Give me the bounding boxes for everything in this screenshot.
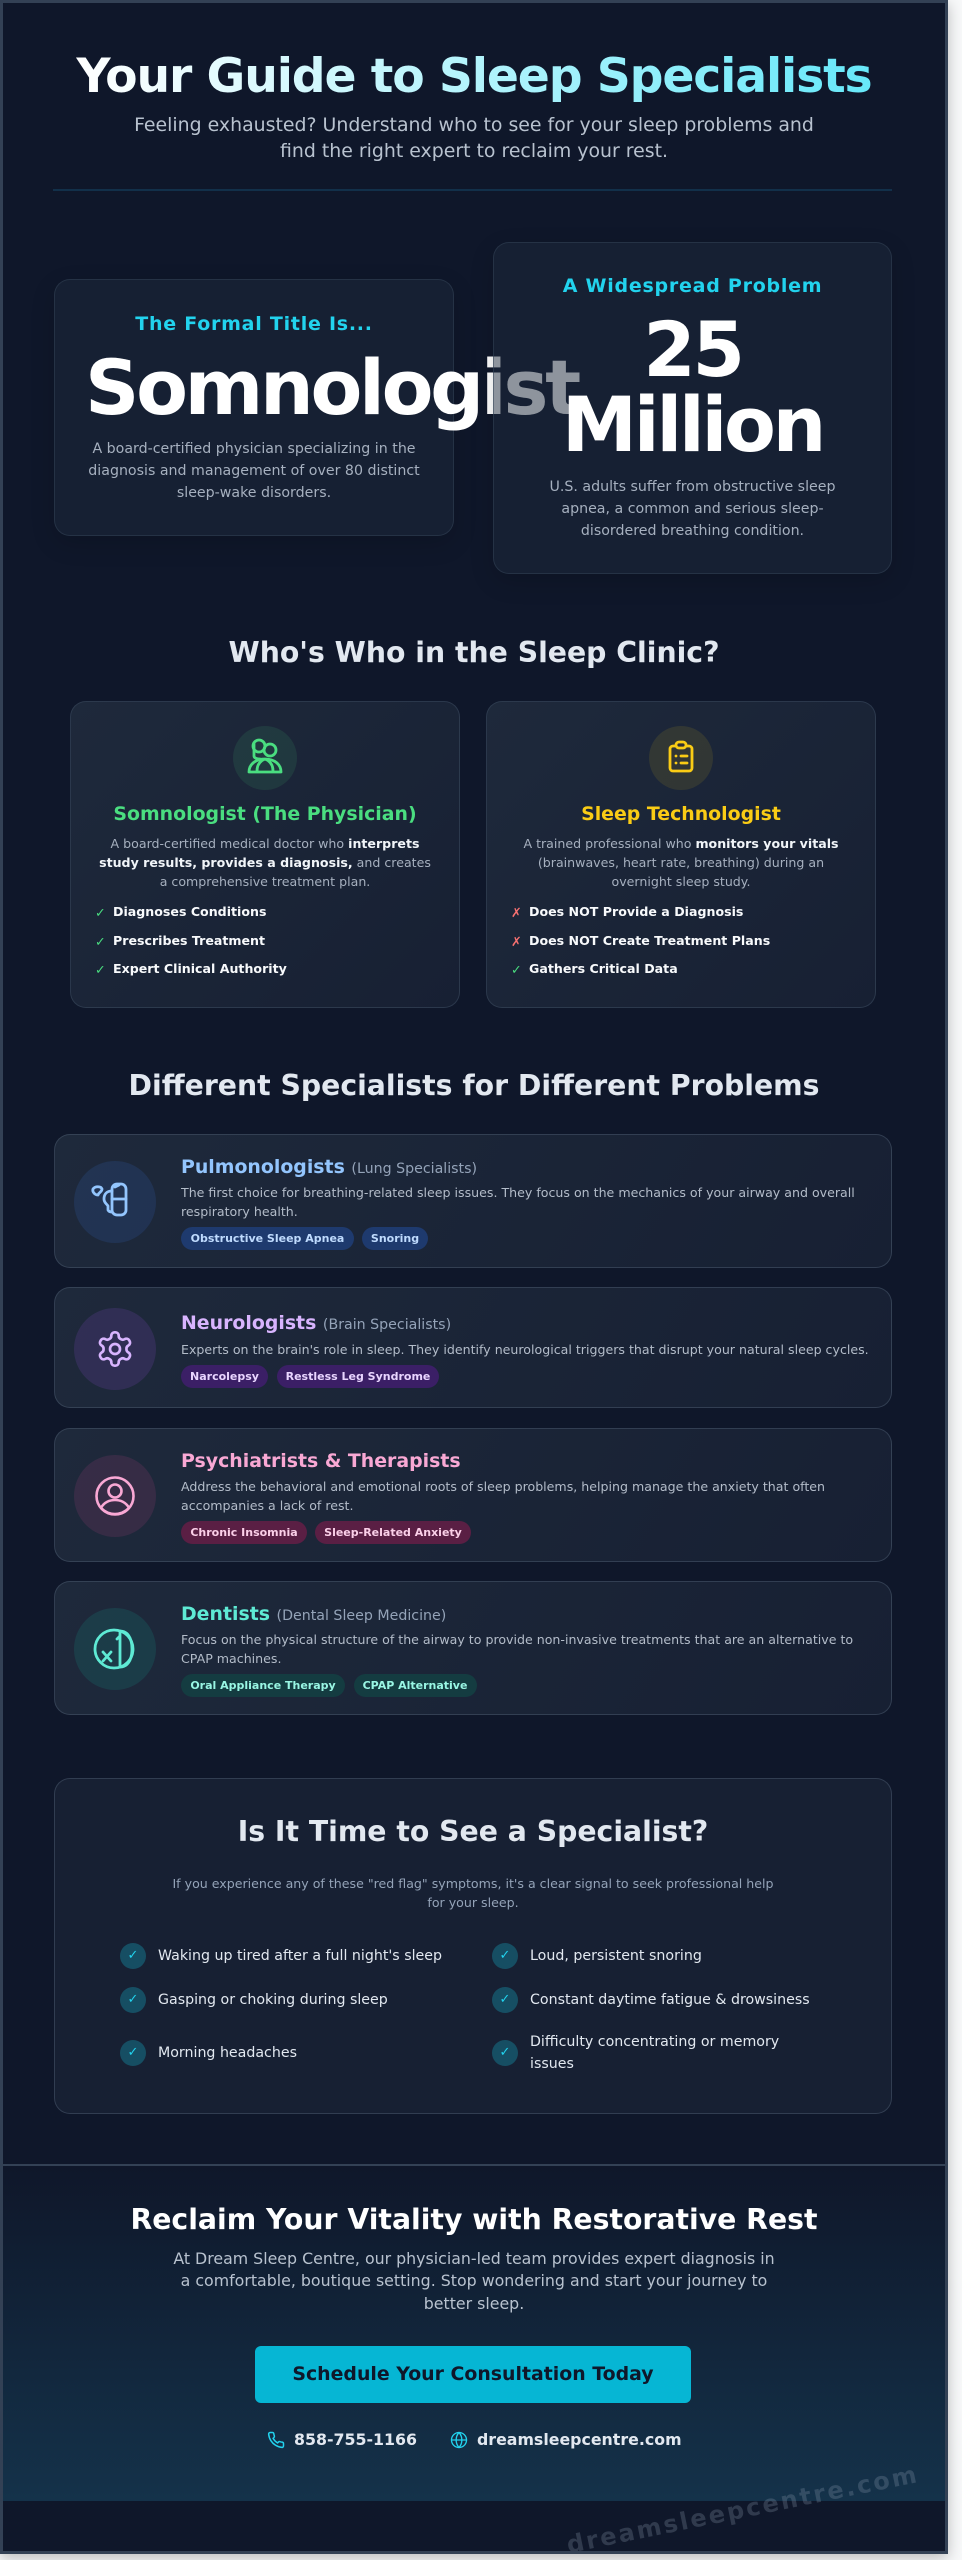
check text: Difficulty concentrating or memory	[530, 2034, 779, 2050]
list: technologist duties: ✗	[511, 934, 522, 950]
statistic: 25 million: Million	[562, 380, 823, 468]
card title: Somnologist (The Physician)	[113, 803, 417, 825]
specialist title: Psychiatrists & Therapists	[181, 1450, 461, 1472]
icon: clipboard	[649, 726, 713, 790]
specialist description: Address the behavioral and emotional roots of sleep problems, helping manage the anxiety that often	[181, 1478, 825, 1494]
heading: who's who: Who's Who in the Sleep Clinic?	[228, 636, 719, 669]
panel: widespread problem	[493, 242, 892, 574]
icon: lungs	[74, 1161, 156, 1243]
statistic description	[550, 479, 835, 539]
subtitle: find the right expert to reclaim your rest.	[280, 140, 668, 162]
footer description: a comfortable, boutique setting. Stop wondering and start your journey to	[181, 2271, 767, 2290]
check item: ✓	[500, 1992, 510, 2007]
card title: Sleep Technologist	[581, 803, 781, 825]
tag	[362, 1226, 428, 1250]
checklist intro: If you experience any of these "red flag" symptoms, it's a clear signal to seek professional help	[172, 1876, 774, 1891]
statistic: 25 million	[562, 306, 823, 468]
tag: CPAP Alternative	[363, 1678, 467, 1692]
panel: red flag checklist	[54, 1778, 892, 2114]
tag: Obstructive Sleep Apnea	[191, 1232, 344, 1244]
panel: sleep technologist	[486, 701, 876, 1008]
list: physician duties: Expert Clinical Authority	[113, 961, 287, 976]
footer description: At Dream Sleep Centre, our physician-led team provides expert diagnosis in	[173, 2249, 775, 2268]
panel: formal title	[54, 279, 454, 536]
button: schedule consultation: Schedule Your Consultation Today	[292, 2363, 654, 2385]
checklist intro: for your sleep.	[427, 1895, 519, 1910]
check item	[492, 1987, 518, 2013]
tag: Oral Appliance Therapy	[190, 1678, 336, 1692]
specialist description: Focus on the physical structure of the airway to provide non-invasive treatments that are an alternative to	[181, 1632, 853, 1646]
footer panel	[3, 2164, 945, 2501]
tag: Narcolepsy	[190, 1370, 259, 1382]
list: physician duties: ✓	[95, 906, 106, 921]
tag	[181, 1674, 345, 1696]
icon: user circle	[74, 1455, 156, 1537]
specialist description: Experts on the brain's role in sleep. They identify neurological triggers that disrupt your natural sleep cycles.	[181, 1342, 869, 1356]
check text: Morning headaches	[158, 2045, 297, 2061]
subtitle: Feeling exhausted? Understand who to see for your sleep problems and	[134, 114, 814, 136]
formal title description: diagnosis and management of over 80 distinct	[88, 463, 420, 479]
subtitle	[134, 114, 814, 162]
specialist description	[181, 1632, 853, 1666]
check item	[492, 1943, 518, 1969]
check text: Gasping or choking during sleep	[158, 1992, 388, 2008]
specialist title: Dentists (Dental Sleep Medicine)	[181, 1603, 446, 1625]
check text: issues	[530, 2056, 574, 2072]
icon: gear	[74, 1308, 156, 1390]
check item	[492, 2040, 518, 2066]
tag: Sleep-Related Anxiety	[324, 1526, 462, 1538]
icon: dental	[74, 1608, 156, 1690]
list: technologist duties: Does NOT Provide a Diagnosis	[529, 904, 743, 919]
card description: a comprehensive treatment plan.	[160, 874, 370, 888]
panel: dentists	[54, 1581, 892, 1715]
label: widespread problem: A Widespread Problem	[563, 275, 822, 297]
specialist title: Pulmonologists (Lung Specialists)	[181, 1156, 477, 1178]
panel: somnologist physician	[70, 701, 460, 1008]
tag	[181, 1226, 354, 1250]
card description: overnight sleep study.	[612, 874, 750, 888]
card description	[99, 836, 431, 888]
list: physician duties: ✓	[95, 963, 106, 978]
check item: ✓	[500, 1948, 510, 1963]
checklist heading: Is It Time to See a Specialist?	[238, 1815, 708, 1848]
check text: Loud, persistent snoring	[530, 1948, 702, 1964]
formal title description: sleep-wake disorders.	[177, 485, 331, 501]
statistic description: apnea, a common and serious sleep-	[561, 501, 824, 517]
button: schedule consultation	[255, 2346, 691, 2403]
specialist description: accompanies a lack of rest.	[181, 1498, 354, 1512]
check item: ✓	[128, 2045, 138, 2060]
tag	[181, 1364, 268, 1388]
tag: Chronic Insomnia	[190, 1526, 298, 1538]
card description: (brainwaves, heart rate, breathing) during an	[538, 854, 824, 870]
tag: Restless Leg Syndrome	[286, 1370, 430, 1382]
list: technologist duties: ✓	[511, 963, 522, 978]
contact: phone: 858-755-1166	[294, 2430, 417, 2449]
footer description: better sleep.	[424, 2294, 524, 2313]
list: physician duties: Prescribes Treatment	[113, 932, 265, 948]
check text: Constant daytime fatigue & drowsiness	[530, 1992, 810, 2008]
card description: A board-certified medical doctor who interprets	[111, 836, 419, 850]
specialist title: Neurologists (Brain Specialists)	[181, 1312, 451, 1334]
statistic description: disordered breathing condition.	[581, 523, 804, 539]
icon: physician	[233, 726, 297, 790]
footer description	[173, 2249, 775, 2313]
panel: pulmonologists	[54, 1134, 892, 1268]
specialist description: The first choice for breathing-related sleep issues. They focus on the mechanics of your airway and overall	[181, 1184, 855, 1200]
heading: different specialists: Different Specialists for Different Problems	[129, 1069, 819, 1102]
check text: Waking up tired after a full night's sleep	[158, 1948, 442, 1964]
tag	[354, 1674, 476, 1696]
card description	[523, 836, 839, 888]
list: physician duties: Diagnoses Conditions	[113, 904, 266, 919]
checklist intro	[172, 1876, 774, 1910]
panel: neurologists	[54, 1287, 892, 1408]
formal title description: A board-certified physician specializing in the	[92, 441, 416, 457]
check item	[120, 1987, 146, 2013]
list: technologist duties: Does NOT Create Treatment Plans	[529, 932, 770, 948]
check item: ✓	[128, 1992, 138, 2007]
check item: ✓	[128, 1948, 138, 1963]
specialist description: CPAP machines.	[181, 1650, 281, 1666]
tag: Snoring	[371, 1232, 419, 1244]
panel: psychiatrists	[54, 1428, 892, 1562]
footer heading: Reclaim Your Vitality with Restorative Rest	[130, 2203, 818, 2236]
statistic description: U.S. adults suffer from obstructive sleep	[550, 479, 835, 495]
list: technologist duties	[511, 904, 770, 978]
tag	[277, 1364, 439, 1388]
big word: Somnologist: Somnologist	[85, 344, 578, 432]
specialist description	[180, 1184, 855, 1218]
list: technologist duties: Gathers Critical Data	[529, 961, 678, 976]
check item: ✓	[500, 2045, 510, 2060]
list: physician duties: ✓	[95, 934, 106, 950]
check item	[120, 2040, 146, 2066]
check item	[120, 1943, 146, 1969]
tag	[181, 1520, 307, 1544]
list: technologist duties: ✗	[511, 906, 522, 921]
specialist description: respiratory health.	[181, 1204, 298, 1218]
tag	[315, 1520, 471, 1544]
contact: website: dreamsleepcentre.com	[477, 2430, 682, 2449]
statistic: 25 million: 25	[643, 306, 742, 394]
card description: A trained professional who monitors your vitals	[523, 836, 839, 850]
check text	[530, 2034, 779, 2072]
specialist description	[181, 1478, 825, 1512]
list: physician duties	[95, 904, 287, 978]
label: formal title: The Formal Title Is...	[135, 313, 373, 335]
title: Your Guide to Sleep Specialists	[76, 49, 872, 104]
card description: study results, provides a diagnosis, and creates	[99, 854, 431, 870]
formal title description	[88, 441, 420, 501]
